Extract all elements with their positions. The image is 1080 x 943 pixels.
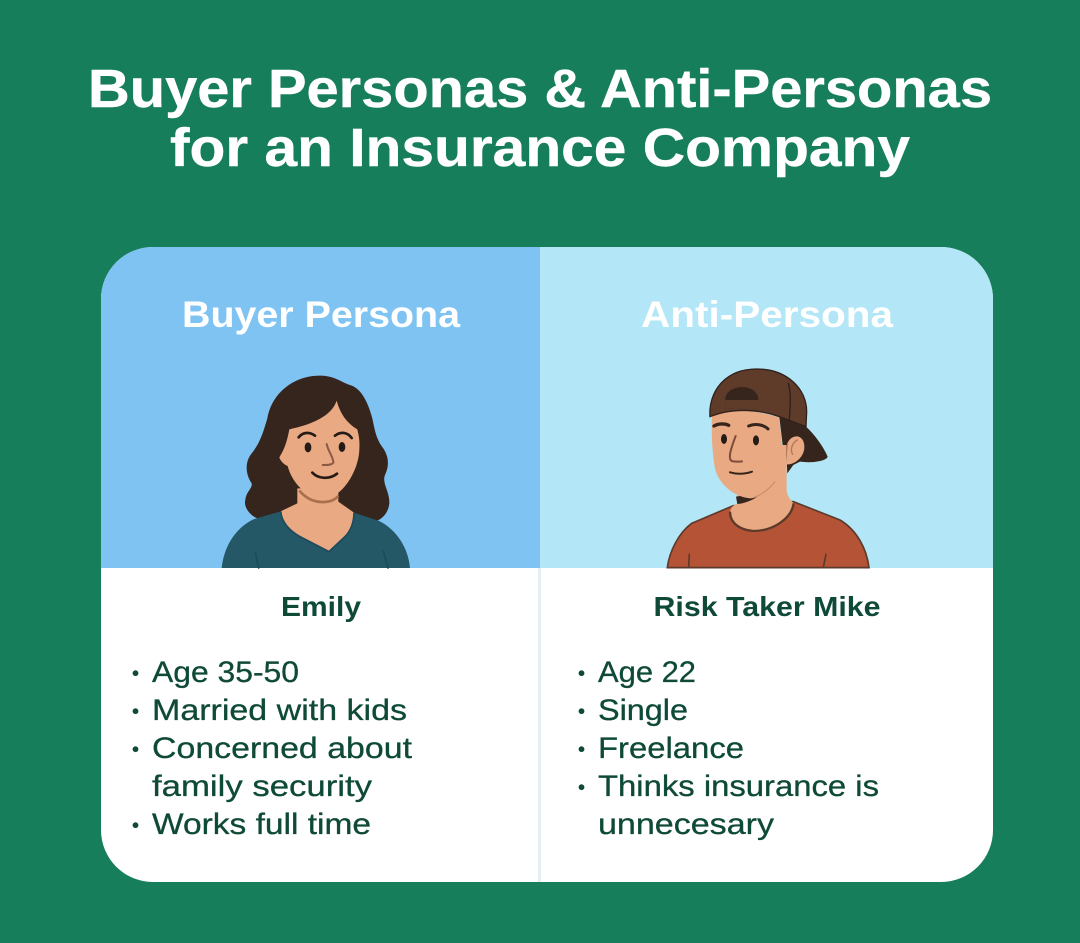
list: Mike traits: unnecesary [598, 808, 774, 841]
list: Mike traits: • [578, 739, 585, 761]
list: Mike traits [578, 656, 879, 841]
list: Mike traits: Age 22 [598, 656, 696, 689]
heading: anti-persona: Anti-Persona [641, 294, 893, 335]
list: Mike traits: Freelance [598, 732, 744, 765]
list: Emily traits: Married with kids [152, 694, 407, 727]
list: Mike traits: • [578, 701, 585, 723]
list: Emily traits: • [132, 815, 139, 837]
list: Emily traits: Concerned about [152, 732, 413, 765]
list: Mike traits: • [578, 777, 585, 799]
title: for an Insurance Company [170, 118, 910, 178]
heading: buyer persona: Buyer Persona [182, 294, 460, 335]
list: Emily traits: family security [152, 770, 372, 803]
title [88, 59, 992, 178]
list: Emily traits [132, 656, 413, 841]
list: Emily traits: • [132, 663, 139, 685]
name: Emily: Emily [281, 591, 361, 622]
list: Mike traits: Single [598, 694, 688, 727]
list: Emily traits: • [132, 739, 139, 761]
list: Mike traits: • [578, 663, 585, 685]
title: Buyer Personas & Anti-Personas [88, 59, 992, 119]
comparison card [101, 247, 993, 882]
illustration: Emily [222, 376, 410, 568]
list: Emily traits: Age 35-50 [152, 656, 299, 689]
list: Emily traits: Works full time [152, 808, 371, 841]
list: Emily traits: • [132, 701, 139, 723]
list: Mike traits: Thinks insurance is [598, 770, 879, 803]
illustration: Risk Taker Mike [667, 369, 869, 568]
name: Risk Taker Mike: Risk Taker Mike [654, 591, 880, 622]
